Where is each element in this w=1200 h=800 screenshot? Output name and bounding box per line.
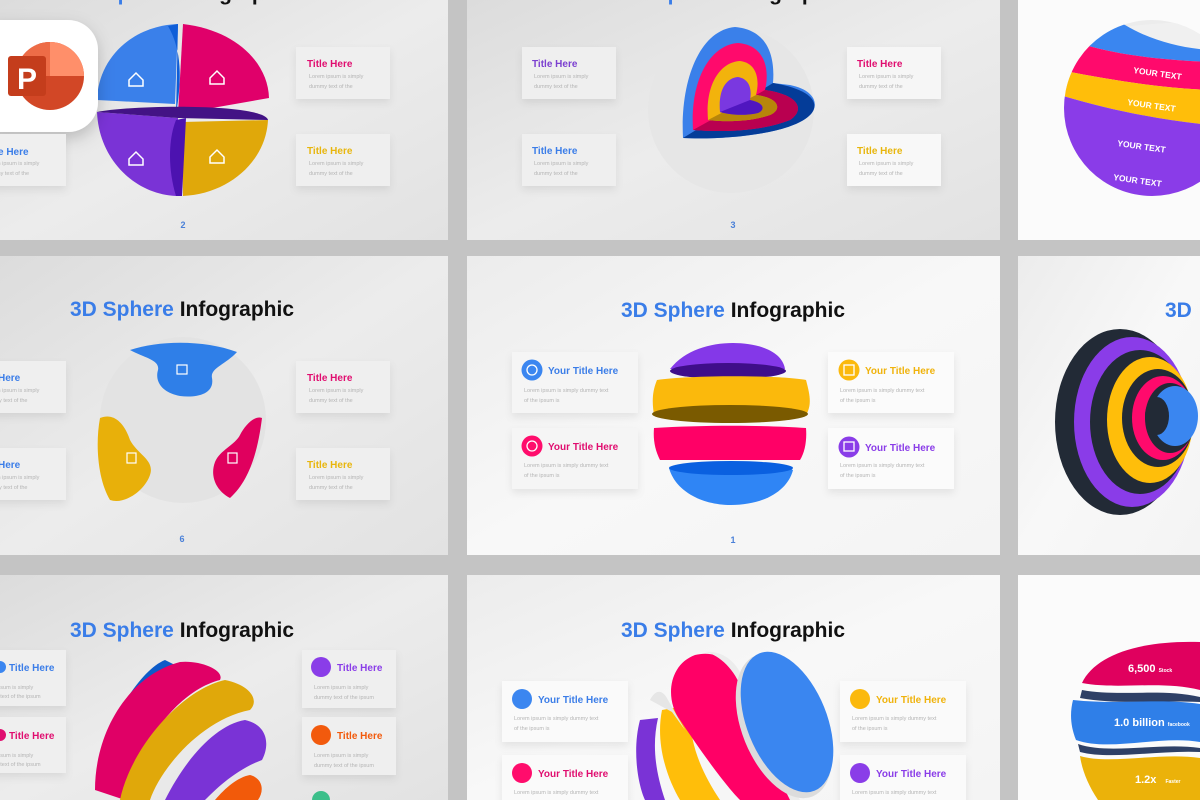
card: yellow Title Here (296, 134, 390, 186)
card: pink Your Title Here: of the ipsum is (524, 473, 560, 479)
card: purple Title Here: dummy text of the ipsum (314, 695, 374, 701)
card: pink Title Here (296, 361, 390, 413)
card: pink Your Title Here: Your Title Here (538, 769, 609, 780)
slide: bottom-right stats sphere (1018, 575, 1200, 800)
title: 3D Sphere Infographic (70, 298, 294, 321)
card: orange Title Here: dummy text of the ipsum (314, 763, 374, 769)
card: yellow Your Title Here: of the ipsum is (852, 726, 888, 732)
icon: powerpoint: P (17, 63, 37, 96)
icon: powerpoint (0, 20, 98, 132)
card: pink Title Here (296, 47, 390, 99)
slide: top-left quadrant sphere (0, 0, 448, 240)
card: yellow Title Here: Lorem ipsum is simply (309, 161, 364, 167)
card: pink Your Title Here (502, 755, 628, 800)
title fragment: 3D (1165, 299, 1192, 322)
card: purple Title Here: Title Here (532, 59, 578, 70)
icons (177, 365, 187, 374)
card: pink Title Here: Title Here (307, 373, 353, 384)
stats ribbons (1071, 642, 1200, 800)
card: yellow Title Here: Lorem ipsum is simply (859, 161, 914, 167)
card: yellow Your Title Here (840, 681, 966, 742)
card: purple Your Title Here (828, 428, 954, 489)
card: pink Title Here: Title Here (307, 59, 353, 70)
slide: top-right banded sphere: YOUR TEXT (1113, 172, 1163, 189)
puzzle sphere (98, 337, 266, 503)
card: pink Your Title Here: Your Title Here (548, 442, 619, 453)
title: 3D Sphere Infographic (621, 299, 845, 322)
card: pink Title Here: dummy text of the (309, 398, 353, 404)
slide: top-right banded sphere (1018, 0, 1200, 240)
slide: top-right banded sphere: YOUR TEXT (1127, 97, 1177, 114)
stats ribbons: 1.0 billion facebook (1114, 717, 1190, 729)
page number: 6 (179, 534, 185, 544)
slide: top-right banded sphere: YOUR TEXT (1117, 138, 1167, 155)
card: left Title Here 2 (0, 717, 66, 773)
card: yellow Title Here: Title Here (307, 146, 353, 157)
card: blue Your Title Here: of the ipsum is (514, 726, 550, 732)
card: purple Title Here: Title Here (337, 663, 383, 674)
card: purple Title Here: dummy text of the (534, 84, 578, 90)
card: purple Your Title Here: Your Title Here (865, 443, 936, 454)
icon: target (522, 360, 542, 380)
card: left Title Here 1 (0, 361, 66, 413)
card: yellow Your Title Here (828, 352, 954, 413)
card: blue Your Title Here (502, 681, 628, 742)
page number: 2 (180, 220, 186, 230)
slide: top-middle heart (467, 0, 1000, 240)
card: blue Title Here: Title Here (532, 146, 578, 157)
card: yellow Title Here: dummy text of the (859, 171, 903, 177)
card: pink Title Here: Lorem ipsum is simply (859, 74, 914, 80)
icon: houses (129, 71, 224, 165)
card: yellow Your Title Here: Your Title Here (865, 366, 936, 377)
card: blue Your Title Here: of the ipsum is (524, 398, 560, 404)
ribbon sphere (95, 660, 266, 800)
card: pink Title Here: dummy text of the (309, 84, 353, 90)
card: pink Your Title Here (512, 428, 638, 489)
sliced sphere (652, 343, 810, 505)
card: purple Your Title Here: Lorem ipsum is simply dummy text (852, 790, 937, 796)
card: pink Your Title Here: Lorem ipsum is simply dummy text (524, 463, 609, 469)
card: purple Title Here: Lorem ipsum is simply (534, 74, 589, 80)
stats ribbons: 1.2x Faster (1135, 774, 1181, 786)
card: purple Title Here (522, 47, 616, 99)
heart graphic (648, 27, 815, 193)
card: yellow Your Title Here: Your Title Here (876, 695, 947, 706)
card: yellow Title Here: Lorem ipsum is simply (309, 475, 364, 481)
card: yellow Title Here (847, 134, 941, 186)
stat labels: 6,500 Stock (1128, 663, 1172, 675)
card: left Title Here 2: Title Here (9, 731, 55, 742)
card: purple Title Here (302, 650, 396, 708)
card: purple Your Title Here: of the ipsum is (840, 473, 876, 479)
card: pink Title Here: Lorem ipsum is simply (309, 74, 364, 80)
slide: middle-left puzzle sphere (0, 256, 448, 555)
card: orange Title Here: Title Here (337, 731, 383, 742)
card: pink Title Here (847, 47, 941, 99)
icon: calendar (838, 360, 860, 380)
card: orange Title Here: Lorem ipsum is simply (314, 753, 369, 759)
slide: middle main sliced sphere (467, 256, 1000, 555)
card: yellow Your Title Here: Lorem ipsum is simply dummy text (840, 388, 925, 394)
card: purple Title Here: Lorem ipsum is simply (314, 685, 369, 691)
band labels: YOUR TEXT (1133, 65, 1183, 82)
card: blue Title Here: dummy text of the (534, 171, 578, 177)
card: blue Title Here (522, 134, 616, 186)
card: pink Your Title Here: Lorem ipsum is simply dummy text (514, 790, 599, 796)
title: 3D Sphere Infographic (70, 619, 294, 642)
quadrant sphere (97, 24, 269, 196)
card: left Title Here 2 (0, 448, 66, 500)
icon: green circle (312, 791, 330, 800)
card: blue Title Here: Lorem ipsum is simply (534, 161, 589, 167)
card: yellow Title Here: dummy text of the (309, 485, 353, 491)
icon: plus circle (522, 436, 542, 456)
card: purple Your Title Here: Your Title Here (876, 769, 947, 780)
card: blue Your Title Here (512, 352, 638, 413)
slide: bottom-left ribbon sphere (0, 575, 448, 800)
slide: middle-right rings (1018, 256, 1200, 555)
card: purple Your Title Here: Lorem ipsum is simply dummy text (840, 463, 925, 469)
page number: 1 (730, 535, 736, 545)
card: pink Title Here: Lorem ipsum is simply (309, 388, 364, 394)
page number: 3 (730, 220, 736, 230)
slide: bottom-middle tilted sphere (467, 575, 1000, 800)
card: left Title Here 1 (0, 650, 66, 706)
card: pink Title Here: dummy text of the (859, 84, 903, 90)
card: blue Your Title Here: Your Title Here (538, 695, 609, 706)
title: 3D Sphere Infographic (621, 619, 845, 642)
card: yellow Title Here (296, 448, 390, 500)
icon: screen (838, 436, 860, 458)
card: yellow Title Here: Title Here (857, 146, 903, 157)
tilted sphere (636, 638, 852, 800)
card: yellow Your Title Here: Lorem ipsum is simply dummy text (852, 716, 937, 722)
rings (1055, 329, 1198, 515)
card: pink Title Here: Title Here (857, 59, 903, 70)
card: blue Your Title Here: Lorem ipsum is simply dummy text (514, 716, 599, 722)
card: yellow Your Title Here: of the ipsum is (840, 398, 876, 404)
card: left Title Here 1: Title Here (9, 663, 55, 674)
card: purple Your Title Here (840, 755, 966, 800)
card: orange Title Here (302, 717, 396, 775)
card: blue Your Title Here: Lorem ipsum is simply dummy text (524, 388, 609, 394)
card: left Title Here (0, 134, 66, 186)
card: yellow Title Here: Title Here (307, 460, 353, 471)
card: yellow Title Here: dummy text of the (309, 171, 353, 177)
card: blue Your Title Here: Your Title Here (548, 366, 619, 377)
banded sphere (1064, 20, 1200, 196)
